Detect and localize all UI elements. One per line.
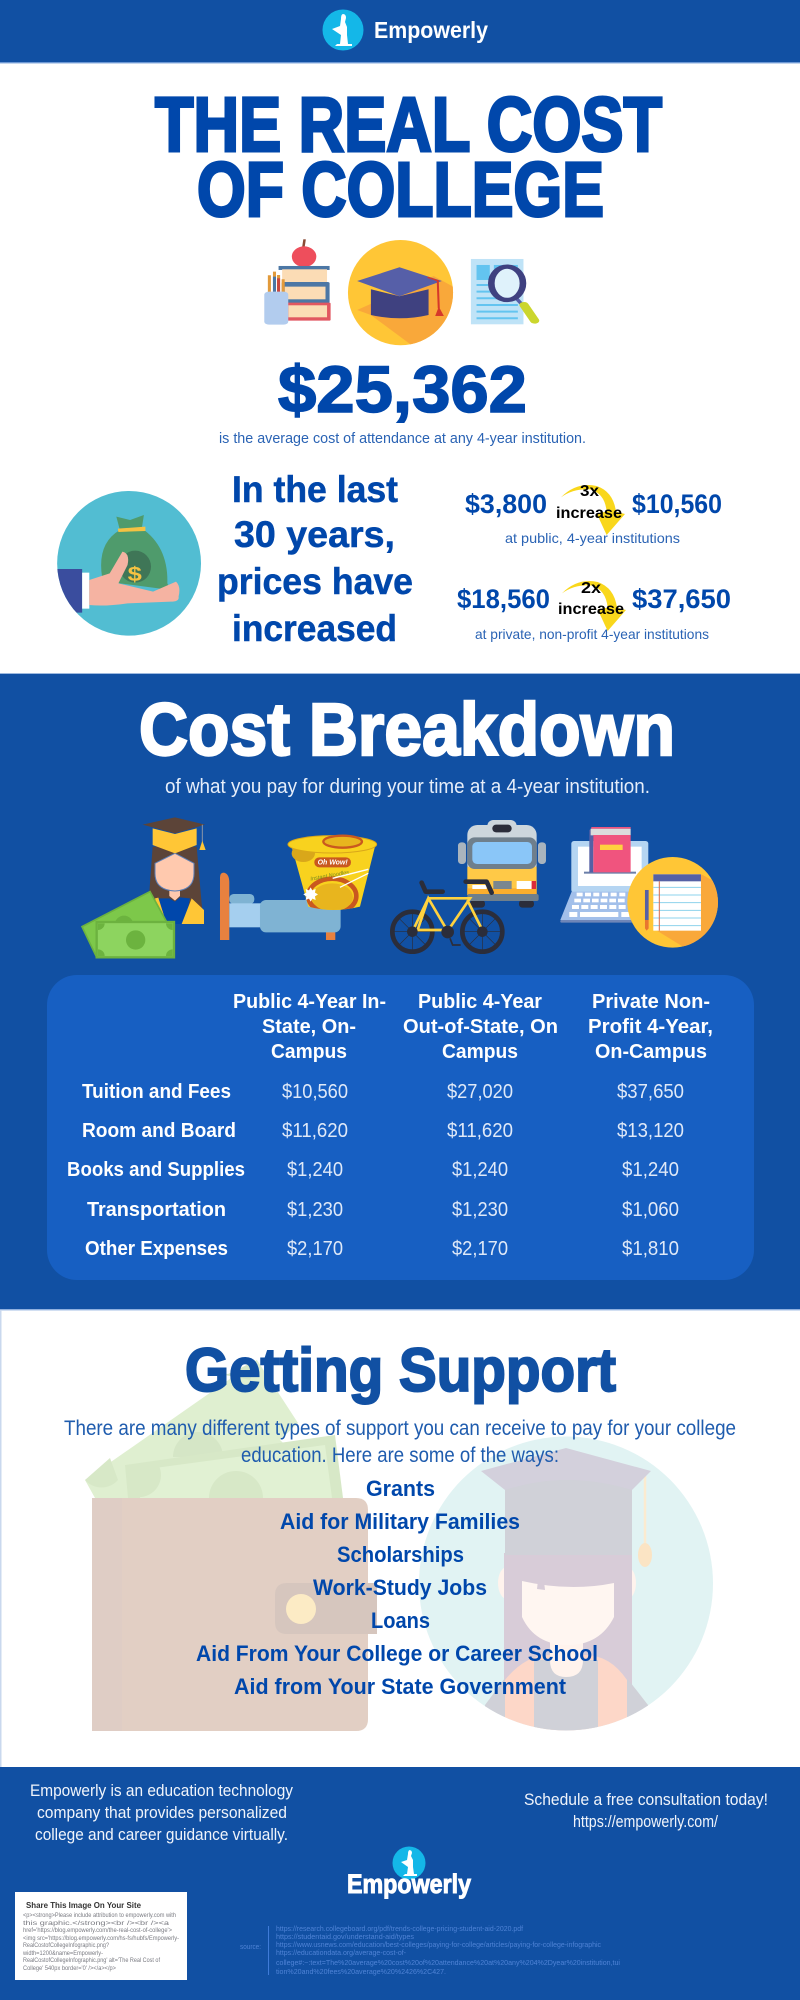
in the last 30 years heading: prices have [217,561,413,602]
share this image box: Share This Image On Your Site [26,1900,141,1910]
price row: private institutions: increase [558,601,624,618]
price row: public institutions: 3x [580,483,599,500]
row: transportation: $1,230 [452,1198,508,1221]
icon: bicycle [392,882,502,952]
row: tuition and fees: $37,650 [617,1080,684,1103]
price row: private institutions: 2x [581,580,601,597]
title [155,82,662,233]
getting support intro [64,1417,736,1467]
footer wordmark: Empowerly [347,1869,471,1899]
share this image box: width=1200&name=Empowerly- [22,1950,103,1957]
in the last 30 years heading: increased [232,608,397,649]
icon: instant noodles cup: Instant Noodles [310,870,350,883]
row: room and board: Room and Board [82,1119,236,1142]
row: books and supplies: Books and Supplies [67,1158,245,1181]
column header: public in-state: State, On- [262,1015,356,1038]
icon: notebook and pen in yellow circle [627,857,723,950]
icon: faded graduate in circle [419,1436,713,1740]
row: room and board: $11,620 [447,1119,513,1142]
column header: public in-state: Campus [271,1040,347,1063]
row: other expenses: $2,170 [287,1237,343,1260]
getting support heading: Getting Support [185,1336,616,1404]
logo wordmark: Empowerly [374,17,488,43]
list of support types: Work-Study Jobs [313,1575,487,1600]
row: tuition and fees: $27,020 [447,1080,513,1103]
price row: public institutions: at public, 4-year institutions [505,530,680,546]
row: books and supplies: $1,240 [622,1158,679,1181]
sources [240,1924,620,1976]
icon: bus [458,820,546,908]
row: books and supplies [67,1158,679,1181]
row: tuition and fees: $10,560 [282,1080,348,1103]
panel: cost table [47,975,754,1280]
row: room and board: $11,620 [282,1119,348,1142]
icon: bed [220,873,341,940]
list of support types: Loans [371,1608,430,1633]
row: tuition and fees [82,1080,684,1103]
column header: public in-state [233,990,386,1063]
icon: magnifier over document [471,259,535,324]
row: transportation: $1,230 [287,1198,343,1221]
about empowerly text [30,1781,293,1844]
cost breakdown subheading: of what you pay for during your time at a 4-year institution. [165,776,650,798]
getting support intro: education. Here are some of the ways: [241,1444,559,1467]
price row: private institutions: $37,650 [632,584,731,614]
average cost caption: is the average cost of attendance at any 4-year institution. [219,431,586,447]
about empowerly text: company that provides personalized [37,1803,287,1822]
icon: instant noodles cup: Oh Wow! [318,860,348,867]
icon: hand holding money bag [51,491,201,636]
sources: https://studentaid.gov/understand-aid/types [276,1932,414,1941]
price row: private institutions: $18,560 [457,584,550,614]
icon: graduation cap in yellow circle [348,240,459,348]
list of support types: Aid for Military Families [280,1509,520,1534]
in the last 30 years heading: In the last [232,469,398,510]
row: other expenses [85,1237,679,1260]
icon: yellow arrow 2x [562,581,626,631]
row: books and supplies: $1,240 [287,1158,343,1181]
icon: faded cash [85,1360,343,1498]
row: books and supplies: $1,240 [452,1158,508,1181]
sources: https://research.collegeboard.org/pdf/trends-college-pricing-student-aid-2020.pdf [276,1924,524,1933]
share this image box: <img src='https://blog.empowerly.com/hs-fs/hubfs/Empowerly- [23,1935,179,1942]
panel: footer [0,1767,800,2000]
share this image box: <p><strong>Please include attribution to empowerly.com with [23,1912,176,1919]
price row: public institutions: $10,560 [632,489,722,519]
list of support types: Grants [366,1476,435,1501]
row: other expenses: $1,810 [622,1237,679,1260]
consultation call to action: https://empowerly.com/ [573,1812,718,1831]
icon: footer logo [392,1846,426,1880]
consultation call to action: Schedule a free consultation today! [524,1790,768,1809]
list of support types [196,1476,598,1699]
sources: https://educationdata.org/average-cost-of- [276,1948,407,1957]
share this image box [15,1892,187,1980]
row: other expenses: Other Expenses [85,1237,228,1260]
column header: private non-profit: Profit 4-Year, [588,1015,713,1038]
icon: faded wallet [92,1498,377,1731]
row: transportation: Transportation [87,1198,226,1221]
consultation call to action [524,1790,768,1831]
row: transportation [87,1198,679,1221]
panel: cost breakdown background [0,673,800,1310]
column header: private non-profit [588,990,713,1063]
row: tuition and fees: Tuition and Fees [82,1080,231,1103]
price row: private institutions: at private, non-profit 4-year institutions [475,626,709,642]
title: THE REAL COST [155,82,662,168]
column header: private non-profit: On-Campus [595,1040,707,1063]
row: transportation: $1,060 [622,1198,679,1221]
share this image box: this graphic.</strong><br /><br /><a [23,1920,170,1927]
sources: tion%20and%20fees%20average%20%2426%2C427. [276,1967,446,1976]
list of support types: Aid from Your State Government [234,1674,567,1699]
list of support types: Scholarships [337,1542,464,1567]
icon: instant noodles cup [288,836,377,913]
column header: public in-state: Public 4-Year In- [233,990,386,1013]
icon: books, apple and pencils [264,239,331,325]
list of support types: Aid From Your College or Career School [196,1641,598,1666]
price row: public institutions: $3,800 [465,489,547,519]
header bar [0,0,800,63]
column header: public out-of-state: Out-of-State, On [403,1015,558,1038]
sources: college#:~:text=The%20average%20cost%20of%20attendance%20at%20any%204%2Dyear%20institution,tui [276,1958,620,1967]
big number: $25,362 [278,352,527,426]
row: room and board: $13,120 [617,1119,684,1142]
share this image box: href='https://blog.empowerly.com/the-real-cost-of-college'> [23,1927,172,1934]
getting support intro: There are many different types of support you can receive to pay for your college [64,1417,736,1440]
row: room and board [82,1119,684,1142]
column header: public out-of-state: Public 4-Year [418,990,542,1013]
sources: source: [240,1944,261,1951]
icon: hand holding money bag: $ [128,563,142,586]
row: other expenses: $2,170 [452,1237,508,1260]
column header: public out-of-state: Campus [442,1040,518,1063]
share this image box: RealCostofCollegeInfographic.png? [23,1942,109,1949]
sources: https://www.usnews.com/education/best-colleges/paying-for-college/articles/paying-for-college-infographic [276,1940,601,1949]
icon: yellow arrow 3x [561,485,625,535]
column header: public out-of-state [403,990,558,1063]
price row: private institutions [457,580,731,642]
share this image box: RealCostofCollegeInfographic.png' alt='The Real Cost of [23,1957,160,1964]
title: OF COLLEGE [197,147,604,233]
price row: public institutions: increase [556,505,622,522]
in the last 30 years heading [217,469,413,649]
cost breakdown heading: Cost Breakdown [139,688,675,771]
share this image box: College' 540px border='0' /></a></p> [23,1965,116,1972]
price row: public institutions [465,483,722,546]
in the last 30 years heading: 30 years, [234,514,395,555]
icon: empowerly logo [322,10,364,50]
about empowerly text: Empowerly is an education technology [30,1781,293,1800]
column header: private non-profit: Private Non- [592,990,710,1013]
icon: graduate with cash [82,817,206,957]
icon: laptop with book [560,827,653,923]
about empowerly text: college and career guidance virtually. [35,1825,288,1844]
